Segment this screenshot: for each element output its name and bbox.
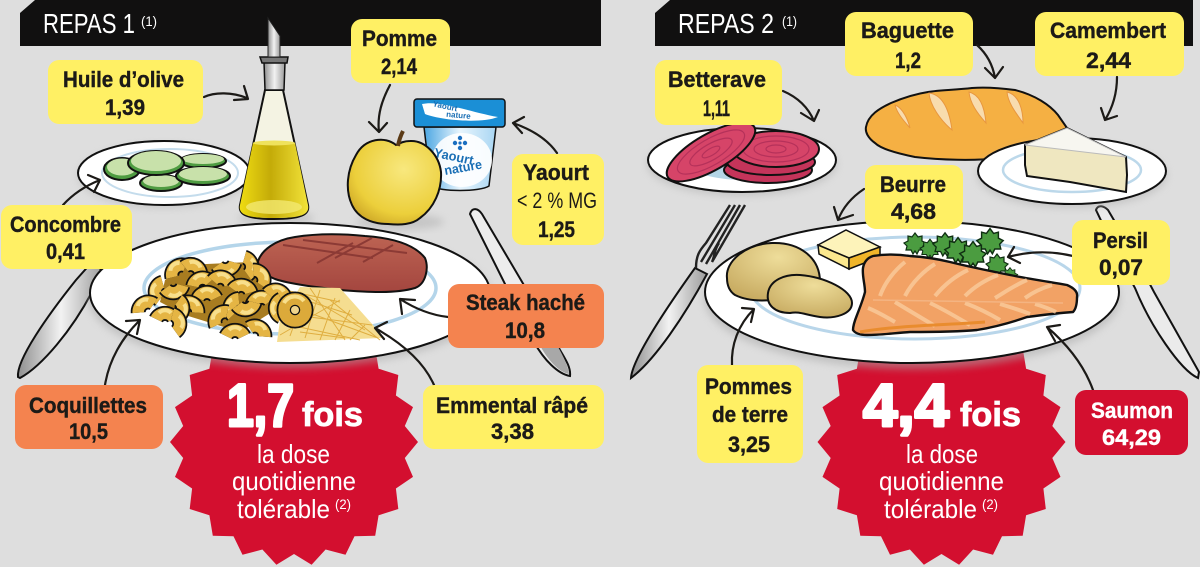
label: saumon: 64,29 (1102, 425, 1161, 450)
arrow: betterave (783, 91, 819, 121)
label: pommes de terre (697, 365, 803, 463)
label: concombre (1, 205, 132, 269)
label: steak hache (448, 284, 604, 348)
label: emmental rape: Emmental râpé (436, 393, 588, 418)
arrow: concombre (63, 175, 100, 205)
label: coquillettes: Coquillettes (29, 393, 147, 418)
header: repas 2 (655, 0, 1193, 46)
label: pomme: Pomme (362, 26, 437, 51)
food: butter (818, 230, 880, 269)
food: coquillettes (134, 256, 306, 337)
label: yaourt: Yaourt (523, 160, 590, 185)
label: huile d'olive: Huile d’olive (63, 67, 184, 92)
label: betterave: Betterave (668, 67, 766, 92)
arrow: coquillettes (105, 320, 140, 385)
label: pomme (351, 19, 450, 83)
label: persil: Persil (1093, 228, 1148, 253)
food: potatoes (727, 243, 852, 317)
icon: yaourt pot: nature (443, 157, 483, 178)
label: beurre: Beurre (880, 172, 946, 197)
icon: knife, repas 1 (470, 209, 570, 376)
label: pommes de terre: Pommes (705, 374, 792, 399)
label: huile d'olive (48, 60, 203, 124)
food: parsley (904, 229, 1018, 282)
label: saumon: Saumon (1091, 398, 1173, 423)
badge: repas 1 starburst: 1,7 (227, 372, 294, 439)
food: steak (258, 234, 427, 292)
badge: repas 2 starburst: la dose (906, 439, 978, 469)
label: pomme: 2,14 (381, 54, 418, 79)
icon: camembert plate (977, 128, 1167, 208)
arrow: beurre (834, 189, 864, 220)
label: steak hache: 10,8 (505, 318, 545, 343)
icon: fork, repas 1 (18, 262, 104, 378)
label: concombre: 0,41 (46, 239, 85, 264)
arrow: pommes de terre (732, 308, 754, 365)
icon: yaourt pot: Yaourt (432, 99, 459, 113)
label: persil: 0,07 (1099, 255, 1143, 280)
label: baguette (845, 12, 973, 76)
header: repas 2: (1) (782, 13, 797, 29)
label: camembert: 2,44 (1086, 48, 1132, 73)
arrow: baguette (977, 45, 1003, 78)
header: repas 1 (20, 0, 601, 46)
label: yaourt: 1,25 (538, 217, 575, 242)
arrow: pomme (369, 85, 390, 132)
label: persil (1072, 220, 1170, 285)
badge: repas 2 starburst: fois (960, 396, 1021, 434)
icon: fork, repas 2 (631, 205, 745, 378)
arrow: saumon (1047, 325, 1093, 390)
arrow: camembert (1101, 77, 1117, 120)
icon: baguette (866, 88, 1067, 160)
label: emmental rape: 3,38 (491, 419, 534, 444)
icon: betterave plate (647, 111, 837, 196)
label: baguette: Baguette (861, 18, 954, 43)
label: steak hache: Steak haché (466, 290, 585, 315)
header: repas 1: REPAS 1 (43, 8, 135, 39)
label: coquillettes (15, 385, 163, 449)
icon: yaourt pot: nature (446, 110, 472, 121)
badge: repas 1 starburst: la dose (257, 439, 330, 469)
food: emmental rape (277, 287, 383, 342)
label: beurre: 4,68 (891, 199, 936, 224)
label: yaourt: < 2 % MG (517, 188, 597, 213)
badge: repas 2 starburst (818, 319, 1066, 565)
badge: repas 2 starburst: (2) (982, 496, 998, 512)
label: camembert: Camembert (1050, 18, 1167, 43)
header: repas 2: REPAS 2 (678, 8, 774, 39)
food: salmon (853, 254, 1077, 335)
badge: repas 1 starburst: fois (302, 396, 363, 434)
label: beurre (865, 165, 963, 229)
arrow: huile (204, 86, 248, 100)
label: pommes de terre: 3,25 (728, 432, 770, 457)
arrow: steak (400, 299, 448, 317)
arrow: emmental (375, 322, 434, 385)
label: betterave: 1,11 (703, 96, 730, 121)
plate: repas 2 main (704, 221, 1120, 369)
badge: repas 2 starburst: quotidienne (879, 466, 1004, 496)
badge: repas 2 starburst: 4,4 (863, 372, 950, 439)
badge: repas 1 starburst (170, 319, 418, 565)
header: repas 1: (1) (141, 13, 157, 29)
arrow: yaourt (513, 117, 557, 153)
label: saumon (1075, 390, 1188, 455)
label: coquillettes: 10,5 (69, 419, 108, 444)
arrow: persil (1008, 247, 1073, 263)
badge: repas 1 starburst: (2) (335, 496, 351, 512)
label: pommes de terre: de terre (712, 402, 788, 427)
label: betterave (655, 60, 782, 125)
icon: yaourt pot (414, 99, 505, 190)
label: emmental rape (423, 385, 604, 449)
label: huile d'olive: 1,39 (105, 95, 145, 120)
badge: repas 1 starburst: tolérable (237, 494, 330, 524)
plate: repas 1 main (88, 223, 492, 368)
label: baguette: 1,2 (895, 48, 921, 73)
badge: repas 2 starburst: tolérable (884, 494, 977, 524)
icon: olive oil bottle (238, 18, 314, 225)
label: concombre: Concombre (10, 212, 121, 237)
icon: knife, repas 2 (1096, 206, 1199, 378)
badge: repas 1 starburst: quotidienne (232, 466, 356, 496)
icon: yaourt pot: Yaourt (433, 145, 476, 168)
label: camembert (1035, 12, 1184, 76)
icon: concombre plate (78, 141, 250, 208)
icon: apple (348, 131, 444, 230)
label: yaourt (512, 154, 604, 245)
concombre slices (104, 151, 230, 191)
